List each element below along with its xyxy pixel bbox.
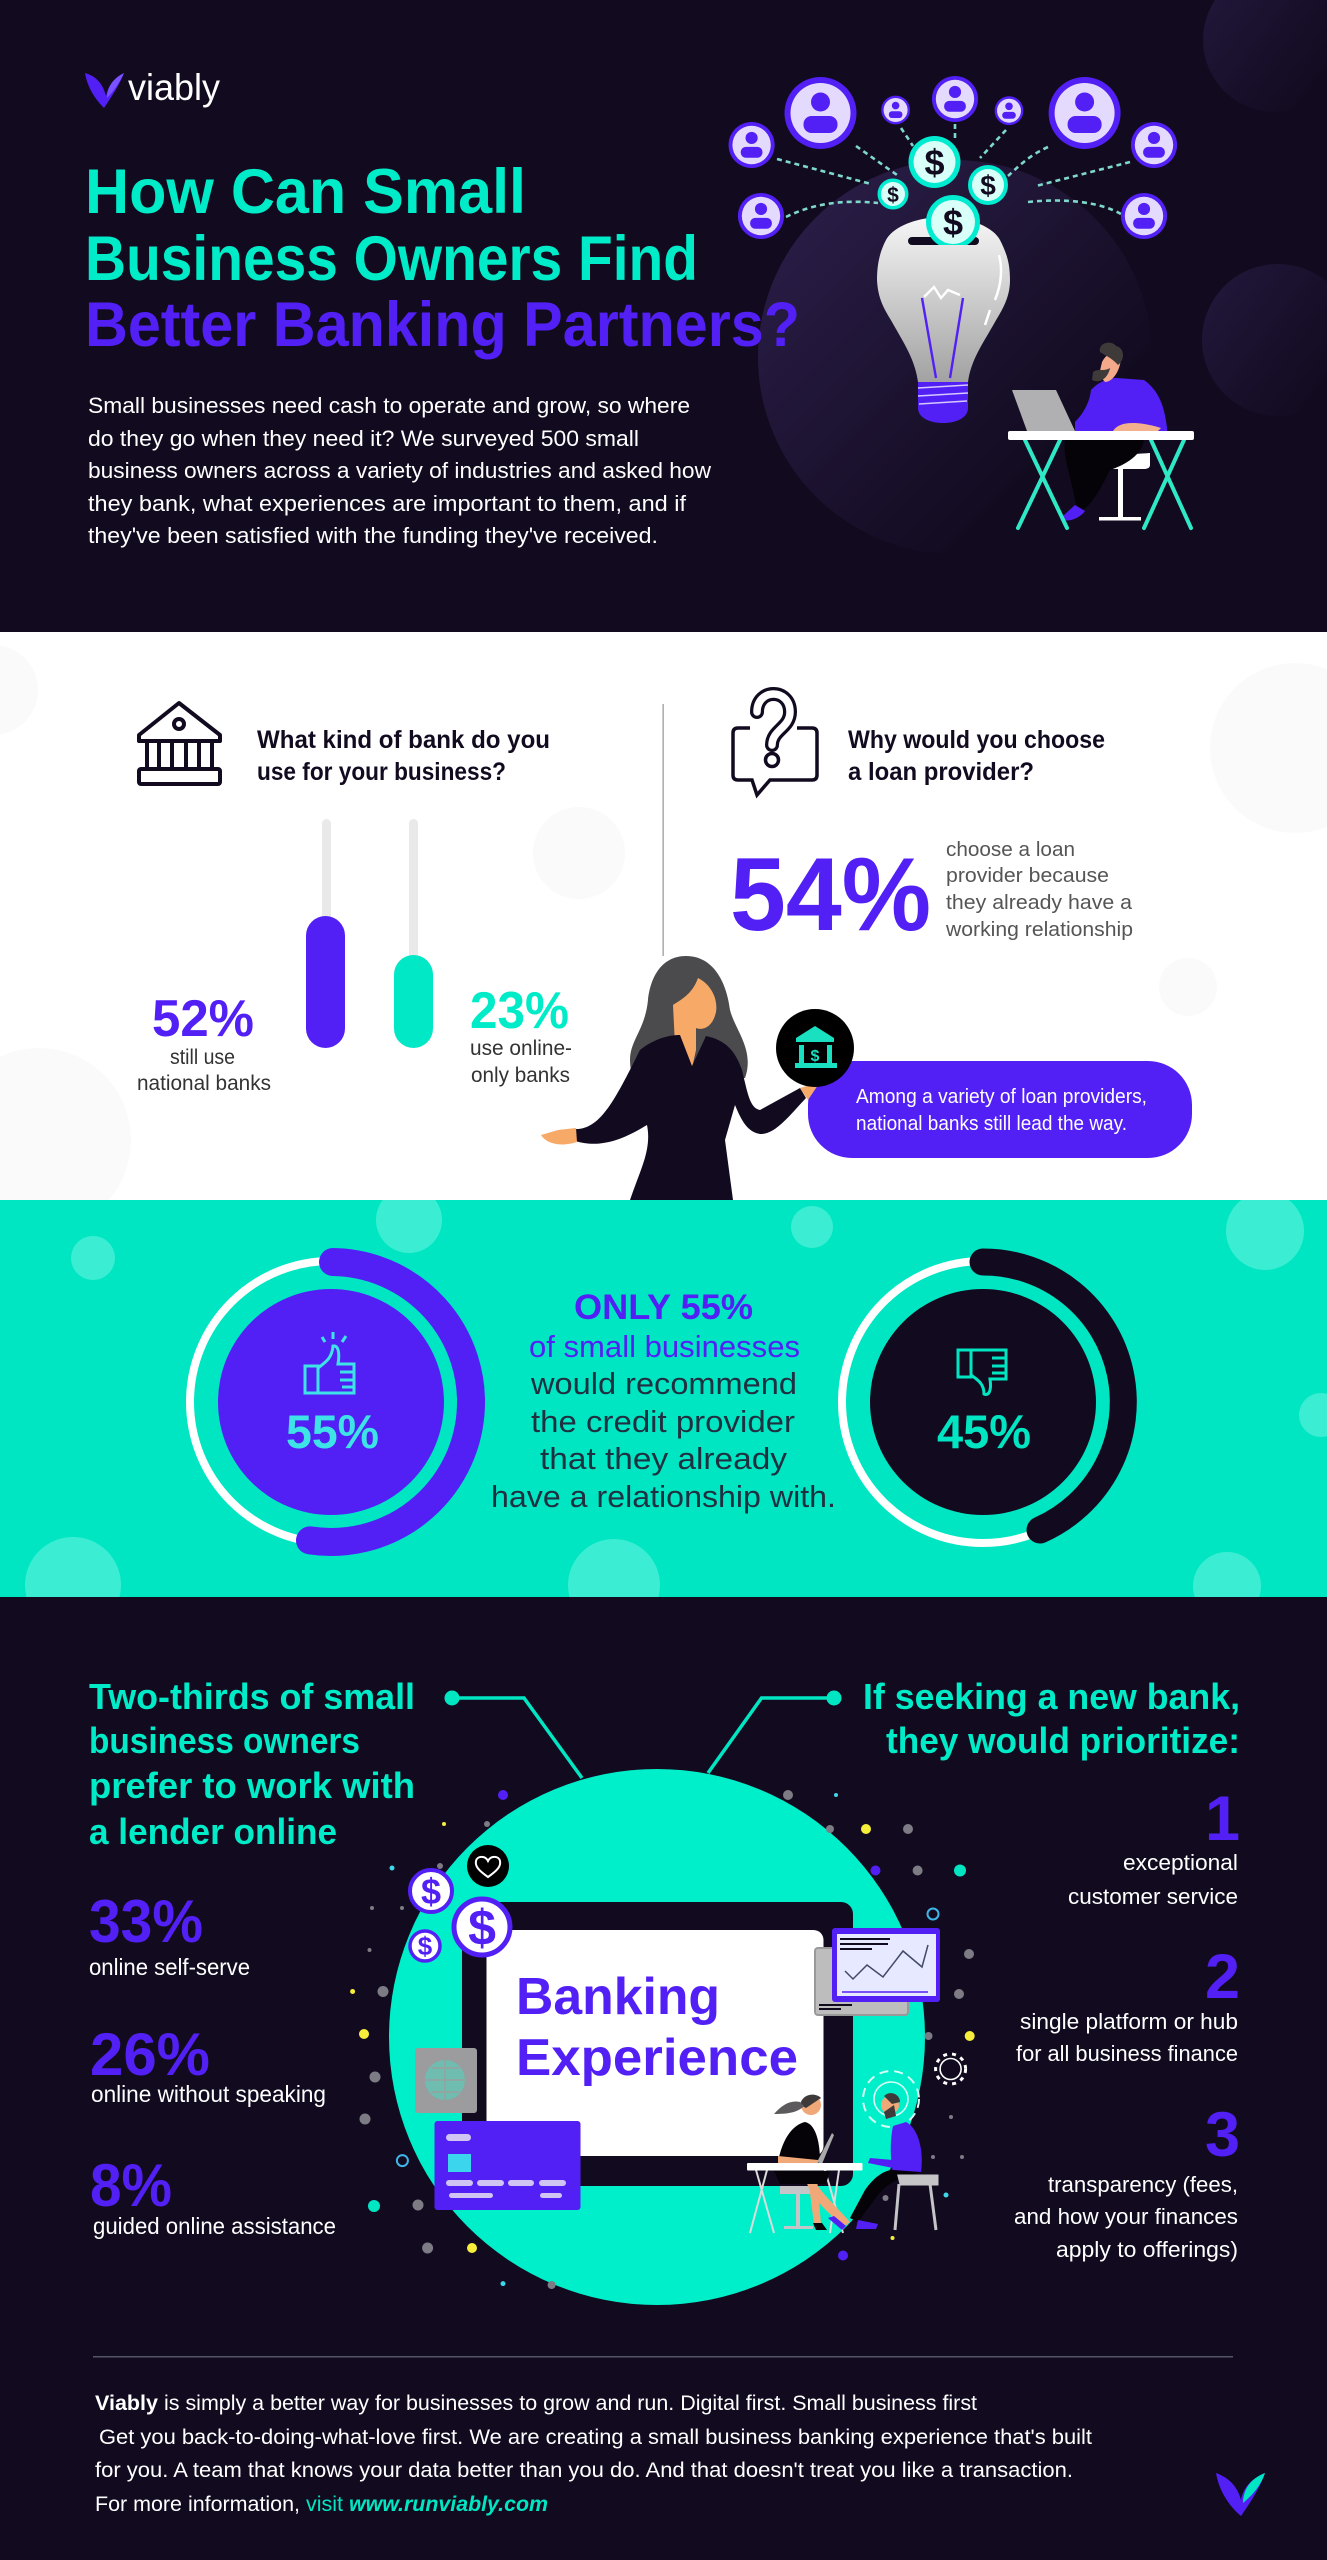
text: only 55% recommend: ONLY 55% (574, 1288, 753, 1327)
text: only 55% recommend: have a relationship with. (491, 1479, 836, 1514)
icon: bank (139, 703, 220, 784)
title: How Can Small (85, 157, 526, 227)
title: Better Banking Partners? (85, 290, 800, 360)
gears (863, 2054, 966, 2127)
coins: $ (418, 1931, 433, 1961)
dashed connector lines (777, 124, 1130, 217)
text: only 55% recommend: of small businesses (529, 1329, 800, 1364)
title (85, 157, 800, 360)
panel: header background (0, 0, 1327, 632)
heading: why choose a loan provider: Why would you choose (848, 726, 1105, 754)
heading: two-thirds prefer online lender (89, 1676, 415, 1852)
ranked list: bank priorities: 2 (1205, 1942, 1240, 2012)
intro paragraph: Small businesses need cash to operate and grow, so where (88, 393, 690, 418)
heading: two-thirds prefer online lender: Two-thirds of small (89, 1676, 415, 1717)
ranked list: bank priorities (1014, 1784, 1240, 2262)
stat: 54% working relationship (730, 837, 1133, 953)
dollar coins: $ (980, 170, 996, 201)
stat list: online preferences: online self-serve (89, 1954, 250, 1980)
stat: 23% online-only banks: 23% (470, 982, 569, 1040)
coins: $ (421, 1871, 441, 1912)
screen title: Experience (516, 2029, 798, 2087)
heading: why choose a loan provider (848, 726, 1105, 786)
stat list: online preferences (89, 1888, 336, 2239)
dollar coins: $ (943, 202, 963, 243)
woman stool and legs (780, 2186, 815, 2229)
icon: bank badge (776, 1009, 854, 1087)
stat list: online preferences: guided online assistance (93, 2213, 336, 2239)
stat: 23% online-only banks: only banks (471, 1064, 570, 1087)
panel: dark lower section (0, 1597, 1327, 2560)
man (891, 2122, 922, 2172)
footer text: www.runviably.com (349, 2492, 548, 2516)
ranked list: bank priorities: customer service (1068, 1884, 1238, 1909)
illustration: banking experience (350, 1690, 975, 2305)
connector lines (452, 1698, 834, 1778)
stat: 54% working relationship: choose a loan (946, 838, 1075, 861)
footer text: for you. A team that knows your data better than you do. And that doesn't treat you like a transaction. (95, 2458, 1073, 2482)
callout: national banks lead: national banks still lead the way. (856, 1112, 1127, 1135)
ranked list: bank priorities: for all business finance (1016, 2041, 1238, 2066)
panel: teal recommendation section (0, 1200, 1327, 1597)
intro paragraph: do they go when they need it? We surveyed 500 small (88, 426, 639, 451)
stat list: online preferences: online without speaking (91, 2081, 326, 2107)
dollar coins (878, 136, 1008, 249)
heart badge (467, 1845, 509, 1887)
credit card (434, 2121, 580, 2210)
stat: 54% working relationship: provider because (946, 864, 1109, 887)
title: Business Owners Find (85, 224, 698, 294)
stat: 52% national banks: still use (170, 1046, 235, 1069)
stat: 54% working relationship: working relationship (945, 918, 1133, 941)
footer text: Get you back-to-doing-what-love first. We are creating a small business banking experience that's built (99, 2425, 1092, 2449)
stat: 52% national banks: national banks (137, 1072, 271, 1095)
screen title (516, 1968, 798, 2087)
stat: 23% online-only banks: use online- (470, 1037, 572, 1060)
intro paragraph: they've been satisfied with the funding they've received. (88, 523, 658, 548)
confetti dots (360, 1790, 974, 2289)
logo mark: footer (1216, 2473, 1265, 2516)
heading: what kind of bank: What kind of bank do you (257, 726, 550, 754)
grey globe card (415, 2048, 477, 2113)
icon: bank badge: $ (811, 1048, 820, 1065)
stat: 23% online-only banks (470, 982, 572, 1087)
text: only 55% recommend: the credit provider (531, 1404, 795, 1439)
man at desk (1012, 390, 1075, 431)
intro paragraph: business owners across a variety of industries and asked how (88, 458, 712, 483)
text: only 55% recommend (491, 1288, 836, 1514)
heading: two-thirds prefer online lender: business owners (89, 1720, 360, 1761)
chart document (815, 1928, 940, 2015)
heading: two-thirds prefer online lender: a lender online (89, 1811, 337, 1852)
ranked list: bank priorities: apply to offerings) (1056, 2237, 1238, 2262)
illustration: woman holding bank icon (541, 956, 854, 1200)
footer text: visit (306, 2492, 343, 2516)
icon: thumbs up (305, 1332, 354, 1393)
icon: question speech bubble (733, 694, 817, 795)
intro paragraph: they bank, what experiences are important to them, and if (88, 491, 687, 516)
ranked list: bank priorities: and how your finances (1014, 2204, 1238, 2229)
ranked list: bank priorities: transparency (fees, (1048, 2172, 1238, 2197)
footer text: Viably (95, 2391, 158, 2415)
screen title: Banking (516, 1968, 720, 2026)
footer text: is simply a better way for businesses to grow and run. Digital first. Small business first (164, 2391, 977, 2415)
stat: 52% national banks (137, 990, 271, 1095)
heading: what kind of bank (257, 726, 550, 786)
heading: what kind of bank: use for your business? (257, 758, 506, 786)
intro paragraph (88, 393, 712, 548)
people icons (784, 77, 856, 149)
stat: 54% working relationship: 54% (730, 837, 931, 953)
heading: why choose a loan provider: a loan provider? (848, 758, 1034, 786)
two people at desk (747, 2093, 937, 2233)
bar chart: bank type (306, 819, 433, 1048)
ranked list: bank priorities: exceptional (1123, 1850, 1238, 1875)
donut: 45% would not recommend (842, 1261, 1124, 1543)
stat: 52% national banks: 52% (152, 990, 254, 1048)
icon: thumbs down (958, 1350, 1006, 1394)
ranked list: bank priorities: 1 (1205, 1784, 1240, 1854)
callout: national banks lead: Among a variety of loan providers, (856, 1085, 1147, 1108)
callout: national banks lead (808, 1061, 1192, 1158)
heading: if seeking a new bank: If seeking a new bank, (863, 1676, 1240, 1717)
logo: viably: viably (128, 67, 220, 108)
text: only 55% recommend: would recommend (530, 1366, 797, 1401)
heading: if seeking a new bank: they would prioritize: (886, 1720, 1240, 1761)
tablet screen (462, 1902, 853, 2186)
bulb (877, 217, 1010, 382)
panel: white survey section (0, 632, 1327, 1232)
donut: 55% recommend: 55% (286, 1405, 379, 1458)
dollar coins: $ (924, 142, 945, 183)
footer text (93, 2356, 1233, 2516)
coins (410, 1870, 510, 1961)
stat list: online preferences: 33% (89, 1888, 203, 1955)
dollar coins: $ (887, 184, 899, 207)
logo: viably (85, 67, 220, 108)
heading: if seeking a new bank (863, 1676, 1240, 1761)
ranked list: bank priorities: single platform or hub (1020, 2009, 1238, 2034)
stat: 54% working relationship: they already have a (946, 891, 1133, 914)
footer text: For more information, (95, 2492, 300, 2516)
illustration: lightbulb piggy bank with people and coins (729, 76, 1194, 528)
ranked list: bank priorities: 3 (1205, 2100, 1240, 2170)
heading: two-thirds prefer online lender: prefer to work with (89, 1765, 415, 1806)
stat list: online preferences: 8% (90, 2152, 172, 2219)
donut: 55% recommend (190, 1261, 472, 1543)
stat list: online preferences: 26% (90, 2021, 210, 2088)
text: only 55% recommend: that they already (540, 1441, 788, 1476)
coins: $ (468, 1900, 496, 1956)
donut: 45% would not recommend: 45% (937, 1405, 1031, 1458)
